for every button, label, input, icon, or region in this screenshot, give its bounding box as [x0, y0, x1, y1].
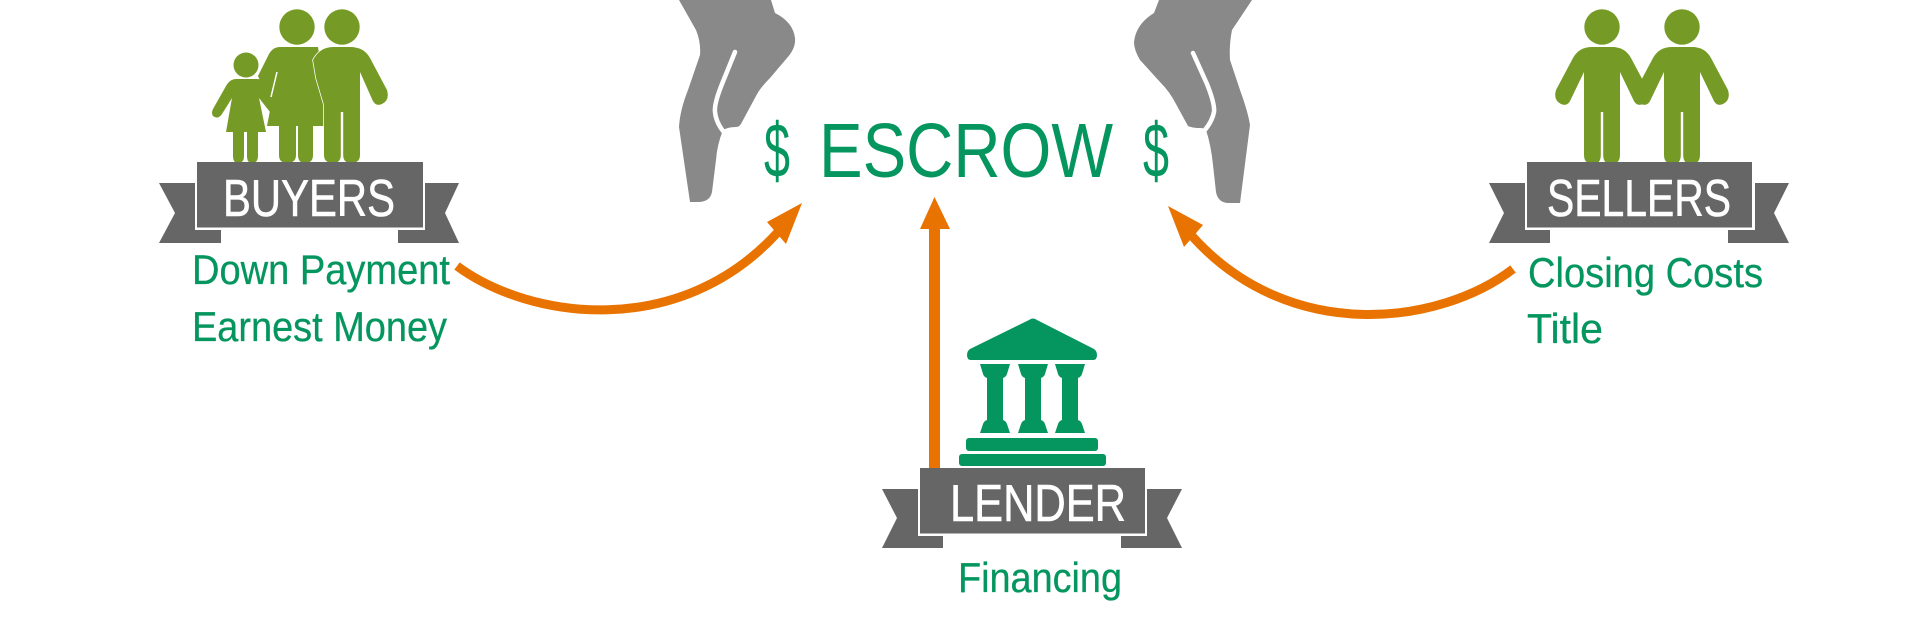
text: sellers contributions	[1527, 249, 1763, 352]
banner: lender: LENDER	[950, 475, 1126, 533]
title: escrow: $	[764, 108, 790, 194]
text: sellers contributions: Closing Costs	[1528, 249, 1763, 296]
arrow: buyers to escrow	[457, 203, 802, 310]
arrow: sellers to escrow	[1168, 206, 1513, 314]
title: escrow: ESCROW	[819, 108, 1113, 194]
banner: sellers: SELLERS	[1547, 170, 1731, 228]
text: buyers contributions	[192, 246, 450, 350]
banner: lender	[882, 468, 1182, 548]
text: sellers contributions: Title	[1527, 305, 1603, 352]
arrow: lender to escrow	[920, 197, 950, 470]
icon: bank	[959, 318, 1106, 466]
icon: right hand	[1134, 0, 1252, 203]
banner: buyers: BUYERS	[223, 170, 395, 228]
text: buyers contributions: Earnest Money	[192, 303, 447, 350]
banner: sellers	[1489, 162, 1789, 243]
icon: buyers family	[212, 9, 388, 163]
title: escrow: $	[1143, 108, 1169, 194]
text: lender contribution: Financing	[958, 554, 1122, 601]
banner: buyers	[159, 162, 459, 243]
icon: left hand	[679, 0, 795, 202]
icon: sellers couple	[1555, 9, 1729, 164]
text: buyers contributions: Down Payment	[192, 246, 450, 293]
